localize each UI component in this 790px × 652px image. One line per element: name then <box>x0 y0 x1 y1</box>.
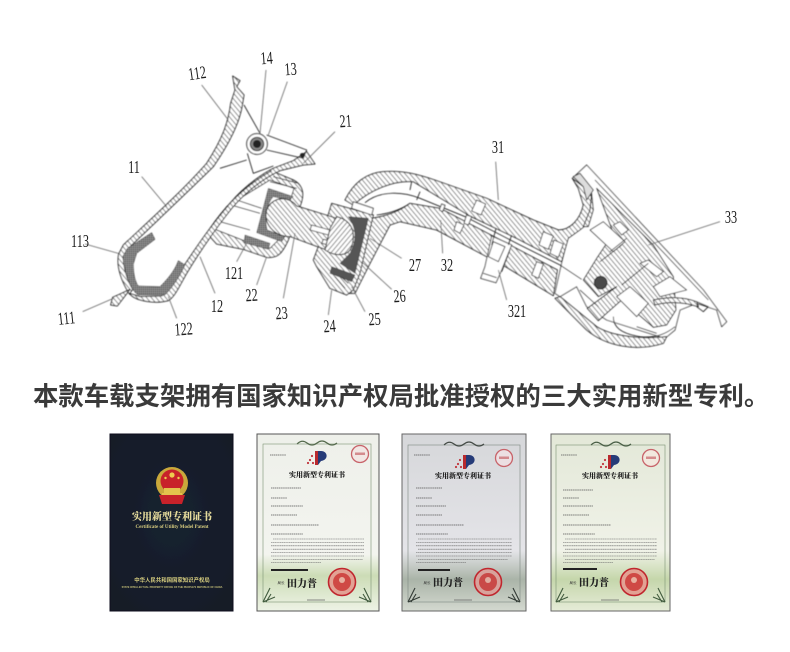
part number labels: 33 <box>725 208 737 228</box>
lower cup 12 <box>129 152 315 302</box>
strip between cup and shell <box>210 171 272 228</box>
part number labels: 32 <box>441 256 453 276</box>
hook on head top <box>573 173 593 200</box>
part number labels: 122 <box>174 319 193 340</box>
lower arm hatch 32 <box>327 203 557 296</box>
certificate 1: 实用新型专利证书 <box>289 470 346 480</box>
pivot arm 13 <box>220 105 307 173</box>
cover title: 实用新型专利证书 <box>132 508 213 523</box>
head body <box>555 165 727 338</box>
leader lines <box>83 70 365 318</box>
part number labels: 26 <box>393 286 407 307</box>
head lip tail <box>653 298 698 307</box>
pivot pin <box>247 134 267 154</box>
certificate 3: 田力普 <box>579 574 609 589</box>
head plate inner line <box>595 180 708 300</box>
issuing office english: STATE INTELLECTUAL PROPERTY OFFICE OF THE PEOPLE'S REPUBLIC OF CHINA <box>122 586 223 589</box>
certificate 3: 局长 <box>570 580 577 586</box>
hub 24 25 <box>313 203 373 295</box>
part number labels: 24 <box>323 316 337 337</box>
patent drawing: phone holder cross-section <box>83 70 727 347</box>
certificate 1 <box>257 434 379 611</box>
certificate 2 <box>402 434 526 611</box>
upper arm shell 31 <box>345 171 592 262</box>
hub core <box>325 217 353 255</box>
cover subtitle: Certificate of Utility Model Patent <box>135 525 209 530</box>
part number labels: 27 <box>409 256 421 276</box>
heading: 本款车载支架拥有国家知识产权局批准授权的三大实用新型专利。 <box>33 383 769 411</box>
clip 321 <box>481 236 512 283</box>
head center block 33 <box>583 188 676 327</box>
bracket interior <box>215 180 294 248</box>
certificate 3 <box>551 434 670 611</box>
head white parts <box>590 222 625 252</box>
cushion pad <box>123 233 185 295</box>
part number labels: 111 <box>57 308 76 330</box>
part number labels: 31 <box>492 138 504 158</box>
part number labels: 22 <box>245 285 258 306</box>
part number labels: 321 <box>508 302 526 322</box>
arm channel lines <box>365 182 582 279</box>
part number labels: 21 <box>339 111 352 132</box>
part number labels: 121 <box>225 264 243 284</box>
socket bracket 21 <box>210 172 303 257</box>
certificate 1: 局长 <box>278 580 285 586</box>
part number labels: 23 <box>275 303 289 324</box>
part number labels: 25 <box>368 309 382 330</box>
certificate 2: 田力普 <box>433 574 463 589</box>
extension arm and suction head <box>327 165 727 347</box>
part number labels: 11 <box>128 158 140 178</box>
bracket ribs <box>220 177 298 230</box>
certificate 1: 田力普 <box>287 575 317 590</box>
national emblem <box>156 467 188 504</box>
issuing office: 中华人民共和国国家知识产权局 <box>134 576 210 584</box>
part number labels: 14 <box>260 48 274 69</box>
back shell 11 <box>118 76 244 294</box>
part number labels: 112 <box>187 63 208 85</box>
certificate 2: 实用新型专利证书 <box>435 471 492 481</box>
arm slots <box>472 200 486 215</box>
screw 121 <box>244 235 270 249</box>
bottom pad <box>555 297 667 347</box>
part number labels: 13 <box>284 59 298 80</box>
certificate 2: 局长 <box>424 580 431 586</box>
socket crescent <box>257 188 293 242</box>
part number labels: 113 <box>71 232 89 252</box>
part number labels: 12 <box>211 297 223 317</box>
clamp head cross-section <box>111 76 373 306</box>
ball-joint stem 23 <box>266 199 337 250</box>
part number labels <box>57 48 737 340</box>
certificate 3: 实用新型专利证书 <box>582 471 639 481</box>
certificate cover <box>110 434 233 611</box>
shell tail 111 <box>111 289 130 306</box>
